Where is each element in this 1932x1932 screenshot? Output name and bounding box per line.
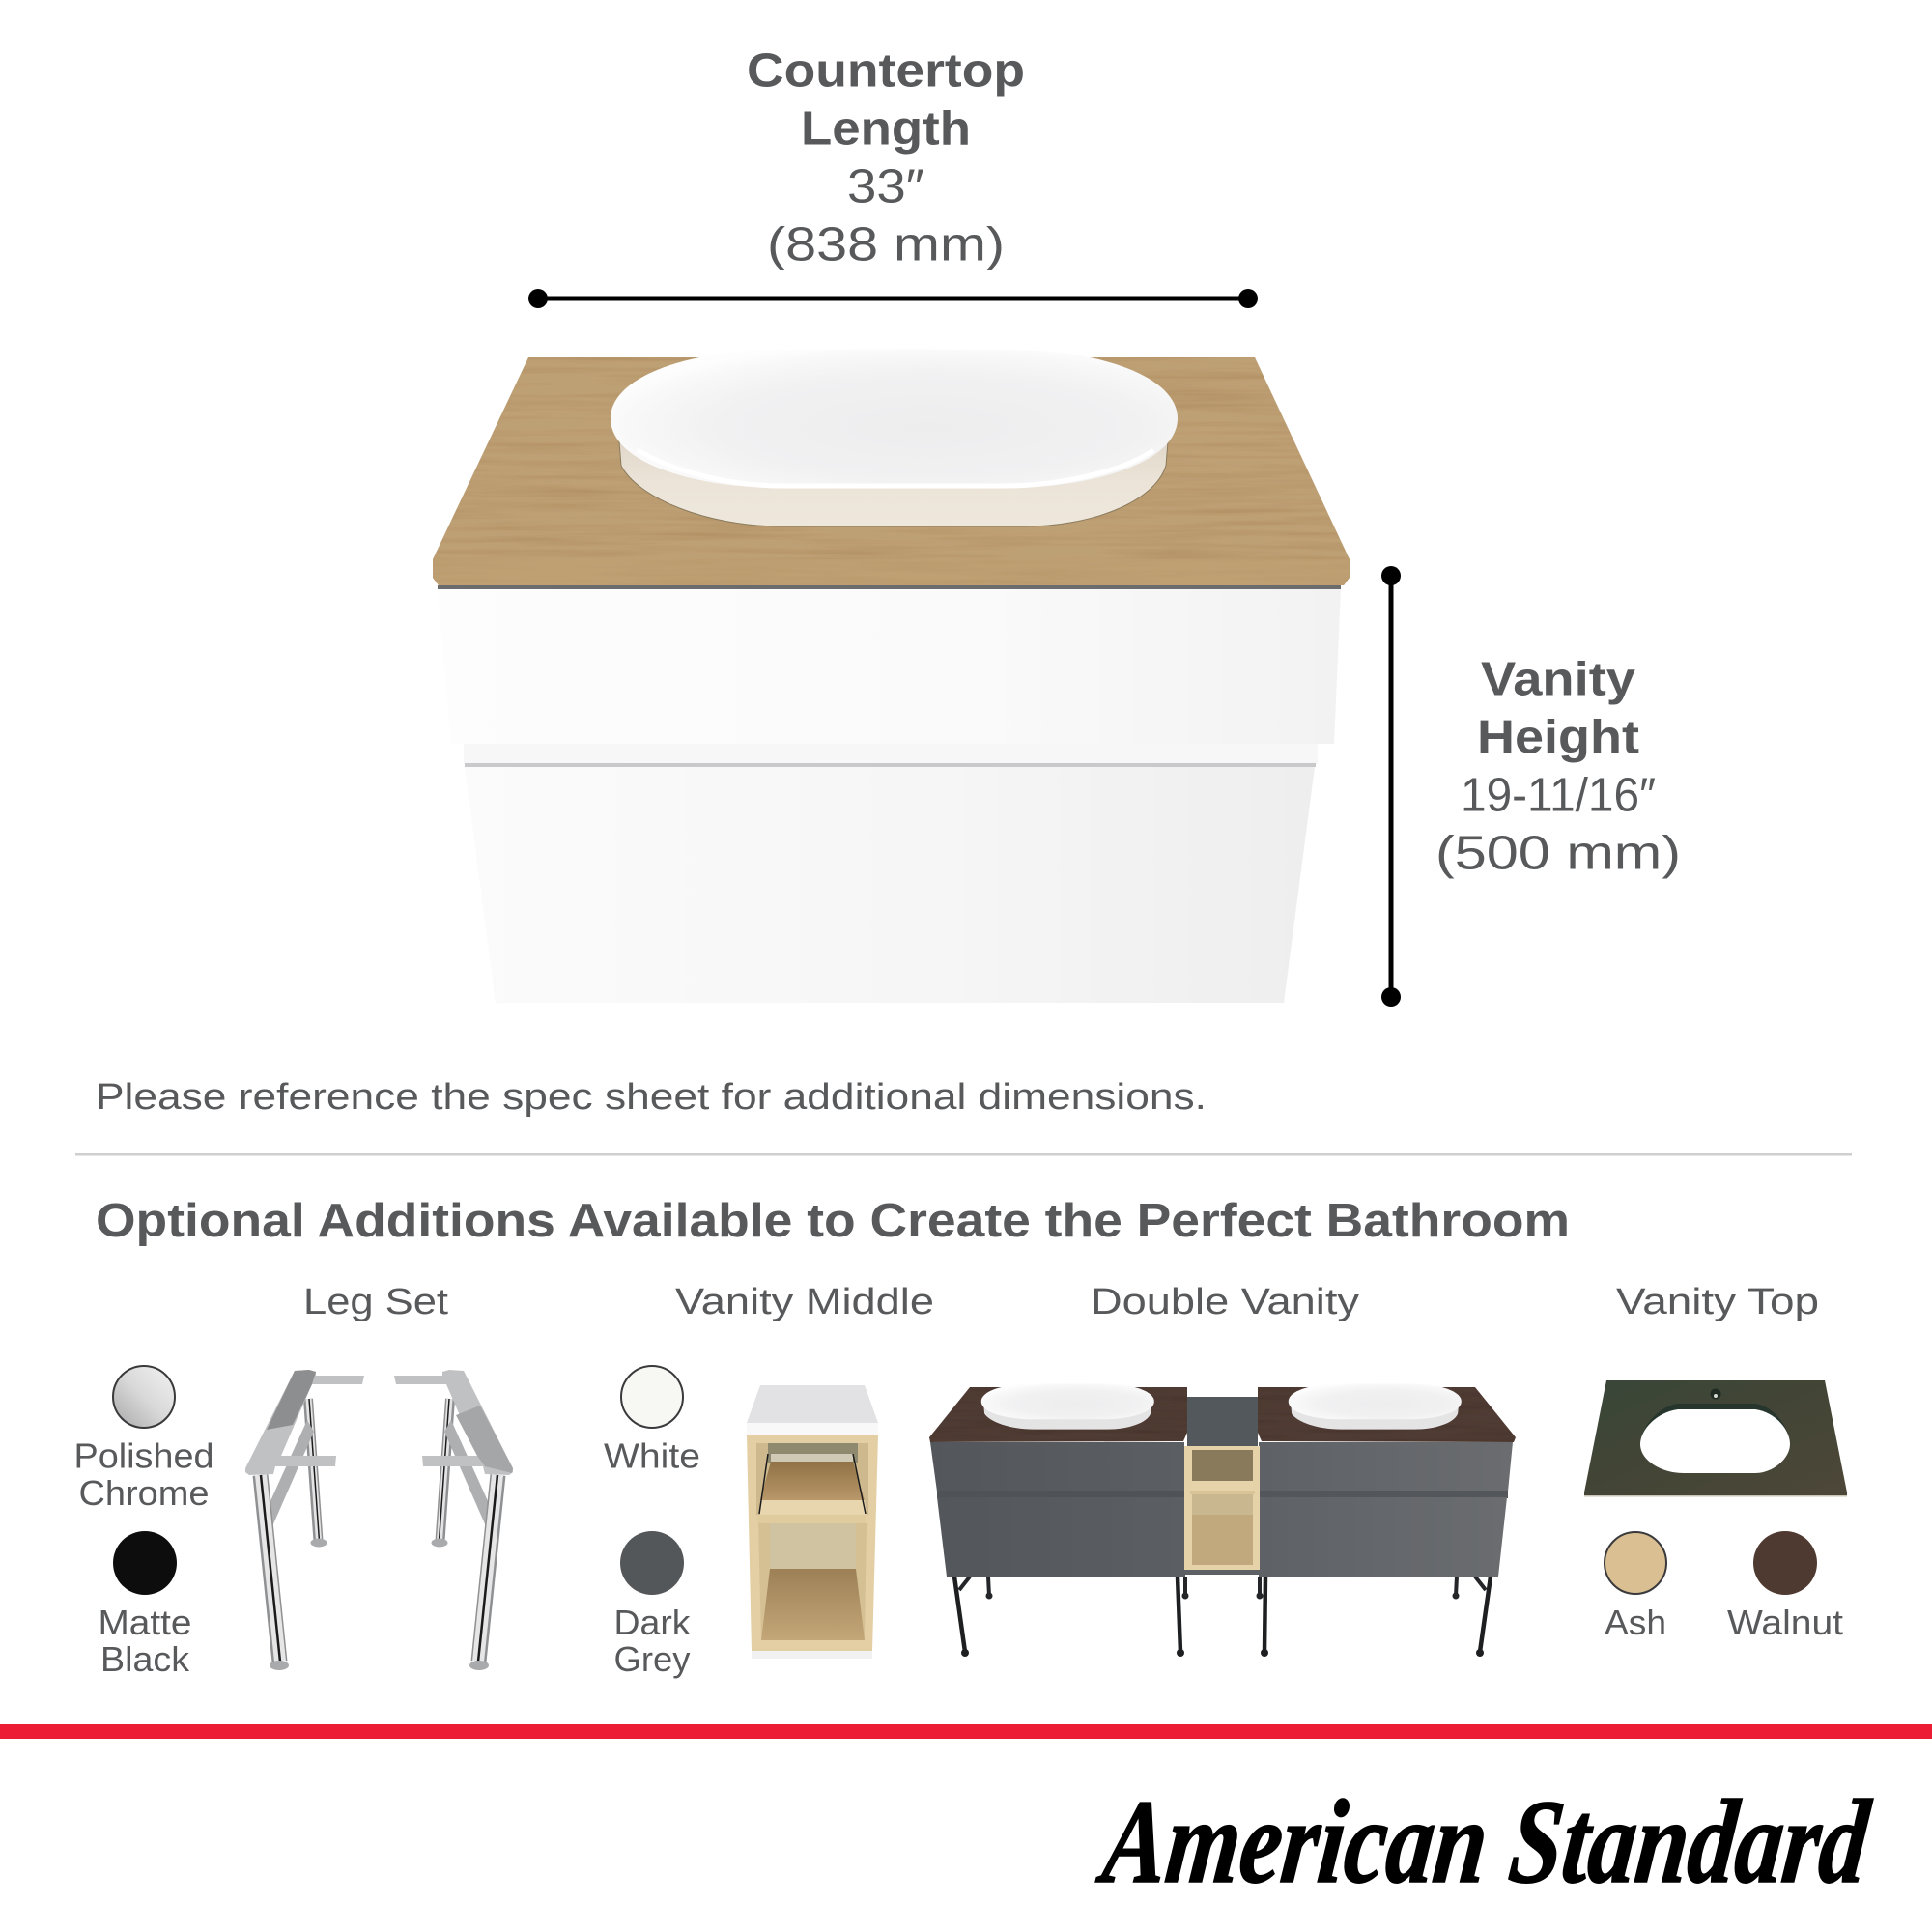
vanity illustration <box>433 350 1350 1003</box>
swatch: matte black: Matte <box>99 1603 191 1642</box>
dimension label: countertop length: (838 mm) <box>767 218 1005 270</box>
swatch: white <box>604 1366 700 1476</box>
dimension label: vanity height: (500 mm) <box>1435 828 1681 880</box>
left basin <box>981 1383 1154 1430</box>
left leg frame <box>245 1370 364 1670</box>
swatch: polished chrome: Polished <box>73 1435 214 1476</box>
countertop <box>433 357 1350 589</box>
column headings: Double Vanity <box>1091 1282 1359 1322</box>
middle open cabinet <box>1184 1446 1260 1570</box>
basin <box>611 350 1178 526</box>
faucet hole <box>1710 1389 1721 1399</box>
swatch: polished chrome <box>73 1366 214 1513</box>
rear legs <box>959 1577 1486 1596</box>
dimension label: vanity height: 19-11/16″ <box>1461 770 1656 822</box>
swatch: dark grey: Dark <box>614 1603 692 1642</box>
arrow: countertop length dimension line <box>528 289 1258 308</box>
swatch: dark grey: Grey <box>614 1639 690 1679</box>
upper drawer <box>438 589 1341 746</box>
swatch: polished chrome: Chrome <box>79 1473 209 1513</box>
column headings: Leg Set <box>303 1282 449 1322</box>
vanity top illustration <box>1584 1380 1847 1497</box>
front legs <box>954 1577 1491 1652</box>
column headings: Vanity Middle <box>675 1282 934 1322</box>
swatch: walnut <box>1727 1531 1843 1642</box>
section heading: Optional Additions Available to Create the Perfect Bathroom <box>96 1195 1570 1247</box>
dimension label: countertop length: Countertop <box>747 44 1025 97</box>
red divider bar <box>0 1724 1932 1739</box>
spec sheet note: Please reference the spec sheet for additional dimensions. <box>96 1077 1207 1118</box>
right leg frame <box>394 1370 513 1670</box>
leg set illustration <box>245 1370 513 1670</box>
middle section top <box>1187 1397 1258 1449</box>
right cabinet <box>1258 1387 1516 1577</box>
left cabinet <box>929 1387 1187 1577</box>
right basin <box>1289 1383 1462 1430</box>
arrow: vanity height dimension line <box>1381 566 1401 1007</box>
dimension label: countertop length: 33″ <box>847 160 924 213</box>
dimension label: countertop length <box>747 44 1025 270</box>
dimension label: countertop length: Length <box>801 102 971 155</box>
sink cutout <box>1640 1404 1790 1444</box>
swatch: dark grey <box>614 1531 692 1679</box>
dimension label: vanity height: Height <box>1477 712 1639 764</box>
swatch: ash <box>1605 1532 1666 1642</box>
swatch: matte black <box>99 1531 191 1679</box>
drawer recess <box>464 744 1318 767</box>
double vanity illustration <box>929 1383 1516 1657</box>
lower drawer <box>465 767 1315 1003</box>
column headings: Vanity Top <box>1616 1282 1819 1322</box>
swatch: matte black: Black <box>100 1639 190 1679</box>
dimension label: vanity height <box>1435 654 1681 880</box>
dimension label: vanity height: Vanity <box>1481 654 1635 706</box>
vanity middle cabinet <box>747 1385 878 1659</box>
swatch: white: White <box>604 1435 700 1476</box>
front leg feet <box>961 1649 1484 1657</box>
column headings <box>303 1282 1819 1322</box>
swatch: walnut: Walnut <box>1727 1603 1843 1642</box>
rear leg feet <box>985 1592 1459 1600</box>
swatch: ash: Ash <box>1605 1603 1666 1642</box>
